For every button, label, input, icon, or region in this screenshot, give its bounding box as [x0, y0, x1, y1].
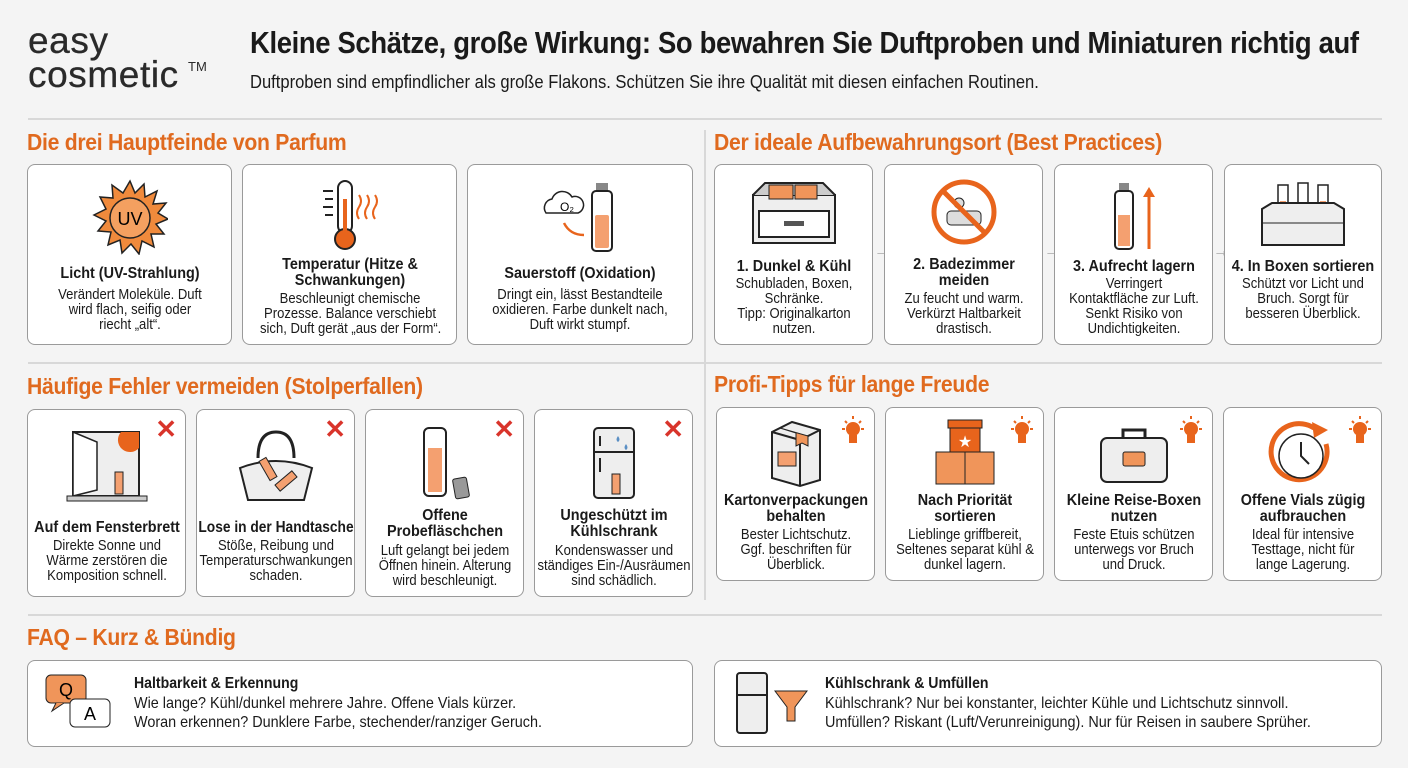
icon: sun UV: UV: [117, 209, 142, 229]
card: use up vials: Ideal für intensive: [1251, 527, 1354, 543]
card: upright: Undichtigkeiten.: [1087, 321, 1180, 337]
icon: upright vial: [1114, 183, 1155, 250]
icon: thermometer: [323, 180, 378, 250]
card: handbag: Temperaturschwankungen: [199, 553, 352, 569]
icon: sun UV: [92, 180, 168, 255]
card: travel boxes: unterwegs vor Bruch: [1074, 542, 1193, 558]
card: temperature: Beschleunigt chemische: [279, 291, 420, 307]
card: open vials: Probefläschchen: [386, 523, 503, 540]
card: open vials: [365, 409, 524, 597]
card: window: [27, 409, 186, 597]
card: upright: Verringert: [1105, 276, 1162, 292]
card: dark and cool: 1. Dunkel & Kühl: [736, 258, 851, 275]
card: travel boxes: [1054, 407, 1213, 581]
card: oxygen: Sauerstoff (Oxidation): [504, 265, 656, 282]
card: use up vials: Testtage, nicht für: [1251, 542, 1354, 558]
logo: TM: [188, 59, 207, 74]
card: boxes: [1224, 164, 1382, 345]
icon: speech bubbles: [46, 674, 110, 728]
card: priority: Seltenes separat kühl &: [896, 542, 1033, 558]
card: window: ✕: [155, 414, 177, 444]
card: no bathroom: meiden: [938, 272, 989, 289]
card: window: Auf dem Fensterbrett: [34, 519, 179, 536]
subtitle: Duftproben sind empfindlicher als große Flakons. Schützen Sie ihre Qualität mit diesen einfachen Routinen.: [250, 72, 1039, 92]
panel: pro tips: [716, 407, 1382, 581]
card: boxes: 4. In Boxen sortieren: [1232, 258, 1374, 275]
card: keep cartons: Überblick.: [766, 557, 825, 573]
panel: best practices: [714, 164, 1382, 345]
card: no bathroom: Verkürzt Haltbarkeit: [907, 306, 1020, 322]
card: light: Licht (UV-Strahlung): [60, 265, 199, 282]
card: handbag: schaden.: [249, 568, 302, 584]
card: window: Wärme zerstören die: [46, 553, 167, 569]
icon: stacked boxes: [936, 420, 994, 484]
card: priority: dunkel lagern.: [924, 557, 1005, 573]
icon: stacked boxes: ★: [957, 432, 972, 451]
card: use up vials: Offene Vials zügig: [1240, 492, 1365, 509]
card: use up vials: lange Lagerung.: [1255, 557, 1350, 573]
card: open vials: Öffnen hinein. Alterung: [378, 558, 511, 574]
icon: suitcase: [1100, 428, 1168, 483]
card: no bathroom: [884, 164, 1043, 345]
card: no bathroom: 2. Badezimmer: [913, 256, 1014, 273]
card: light: [27, 164, 232, 345]
card: fridge: sind schädlich.: [571, 573, 656, 589]
card: priority: Lieblinge griffbereit,: [908, 527, 1021, 543]
card: fridge: [534, 409, 693, 597]
card: boxes: Schützt vor Licht und: [1242, 276, 1364, 292]
panel: FAQ fridge: Kühlschrank & Umfüllen: [825, 675, 989, 692]
logo: cosmetic: [28, 54, 179, 95]
heading: best practices: Der ideale Aufbewahrungsort (Best Practices): [714, 129, 1162, 155]
heading: pro tips: Profi-Tipps für lange Freude: [714, 371, 989, 397]
card: keep cartons: Bester Lichtschutz.: [740, 527, 851, 543]
card: upright: [1054, 164, 1213, 345]
panel: FAQ shelf life: Woran erkennen? Dunklere Farbe, stechender/ranziger Geruch.: [134, 714, 542, 731]
icon: handbag: [238, 430, 314, 501]
card: travel boxes: nutzen: [1110, 508, 1157, 525]
card: open vials: Offene: [422, 507, 467, 524]
card: use up vials: [1223, 407, 1382, 581]
card: dark and cool: [714, 164, 873, 345]
card: fridge: ✕: [662, 414, 684, 444]
card: temperature: Schwankungen): [294, 272, 405, 289]
icon: fridge and funnel: [736, 672, 808, 734]
card: temperature: sich, Duft gerät „aus der Form“.: [260, 321, 441, 337]
icon: window sill: [66, 430, 148, 502]
card: upright: 3. Aufrecht lagern: [1073, 258, 1194, 275]
icon: speech bubbles: A: [84, 704, 96, 724]
logo: easy: [28, 20, 109, 61]
card: upright: Kontaktfläche zur Luft.: [1069, 291, 1198, 307]
icon: box with vials: [1261, 182, 1345, 246]
card: handbag: Lose in der Handtasche: [198, 519, 353, 536]
card: oxygen: oxidieren. Farbe dunkelt nach,: [492, 302, 668, 318]
icon: fridge: [593, 427, 635, 499]
card: light: Verändert Moleküle. Duft: [58, 287, 201, 303]
card: keep cartons: [716, 407, 875, 581]
card: travel boxes: Kleine Reise-Boxen: [1066, 492, 1201, 509]
card: oxygen: Dringt ein, lässt Bestandteile: [497, 287, 663, 303]
icon: oxygen vial: [544, 183, 613, 252]
card: keep cartons: Kartonverpackungen: [723, 492, 868, 509]
card: use up vials: aufbrauchen: [1259, 508, 1346, 525]
card: fridge: ständiges Ein-/Ausräumen: [537, 558, 690, 574]
card: handbag: Stöße, Reibung und: [217, 538, 334, 554]
panel: FAQ fridge: Kühlschrank? Nur bei konstanter, leichter Kühle und Lichtschutz sinnvoll.: [825, 695, 1288, 712]
card: dark and cool: Schränke.: [764, 291, 823, 307]
card: priority: Nach Priorität: [917, 492, 1012, 509]
card: oxygen: [467, 164, 693, 345]
icon: bulb: [1011, 416, 1033, 443]
card: temperature: [242, 164, 457, 345]
icon: bulb: [842, 416, 864, 443]
icon: open vial: [423, 427, 470, 500]
icon: clock: [1268, 421, 1330, 482]
card: light: riecht „alt“.: [99, 317, 160, 333]
card: open vials: ✕: [493, 414, 515, 444]
card: fridge: Ungeschützt im: [560, 507, 667, 524]
panel: FAQ fridge: [714, 660, 1382, 747]
icon: carton: [771, 420, 821, 487]
card: handbag: ✕: [324, 414, 346, 444]
arrow: →: [1044, 243, 1060, 260]
panel: FAQ fridge: Umfüllen? Riskant (Luft/Verunreinigung). Nur für Reisen in saubere Sprüher.: [825, 714, 1311, 731]
icon: oxygen vial: O₂: [560, 200, 574, 214]
card: keep cartons: behalten: [766, 508, 825, 525]
panel: FAQ shelf life: [27, 660, 693, 747]
card: fridge: Kühlschrank: [570, 523, 657, 540]
card: travel boxes: Feste Etuis schützen: [1073, 527, 1194, 543]
card: no bathroom: drastisch.: [936, 321, 991, 337]
card: keep cartons: Ggf. beschriften für: [740, 542, 851, 558]
card: priority: [885, 407, 1044, 581]
card: window: Komposition schnell.: [47, 568, 166, 584]
heading: mistakes: Häufige Fehler vermeiden (Stolperfallen): [27, 373, 423, 399]
arrow: →: [874, 243, 890, 260]
card: dark and cool: Tipp: Originalkarton: [737, 306, 850, 322]
card: no bathroom: Zu feucht und warm.: [904, 291, 1023, 307]
icon: bulb: [1349, 416, 1371, 443]
card: window: Direkte Sonne und: [52, 538, 161, 554]
icon: drawer: [752, 182, 836, 244]
panel: enemies: [27, 164, 693, 345]
card: dark and cool: nutzen.: [772, 321, 815, 337]
card: open vials: Luft gelangt bei jedem: [380, 543, 509, 559]
card: handbag: [196, 409, 355, 597]
card: temperature: Temperatur (Hitze &: [282, 256, 417, 273]
card: oxygen: Duft wirkt stumpf.: [530, 317, 630, 333]
heading: enemies: Die drei Hauptfeinde von Parfum: [27, 129, 346, 155]
card: upright: Senkt Risiko von: [1085, 306, 1182, 322]
icon: bulb: [1180, 416, 1202, 443]
title: Kleine Schätze, große Wirkung: So bewahren Sie Duftproben und Miniaturen richtig auf: [250, 25, 1359, 60]
card: boxes: Bruch. Sorgt für: [1257, 291, 1349, 307]
card: travel boxes: und Druck.: [1102, 557, 1165, 573]
card: fridge: Kondenswasser und: [554, 543, 673, 559]
card: open vials: wird beschleunigt.: [392, 573, 497, 589]
panel: FAQ shelf life: Haltbarkeit & Erkennung: [134, 675, 298, 692]
card: dark and cool: Schubladen, Boxen,: [735, 276, 852, 292]
card: boxes: besseren Überblick.: [1245, 306, 1361, 322]
panel: FAQ shelf life: Wie lange? Kühl/dunkel mehrere Jahre. Offene Vials kürzer.: [134, 695, 516, 712]
card: temperature: Prozesse. Balance verschiebt: [264, 306, 435, 322]
icon: no bathtub: [932, 180, 996, 244]
arrow: →: [1213, 243, 1229, 260]
logo: [28, 20, 207, 95]
panel: mistakes: [27, 409, 693, 597]
icon: speech bubbles: Q: [59, 680, 73, 700]
heading: FAQ: FAQ – Kurz & Bündig: [27, 624, 236, 650]
card: light: wird flach, seifig oder: [68, 302, 191, 318]
card: priority: sortieren: [934, 508, 995, 525]
